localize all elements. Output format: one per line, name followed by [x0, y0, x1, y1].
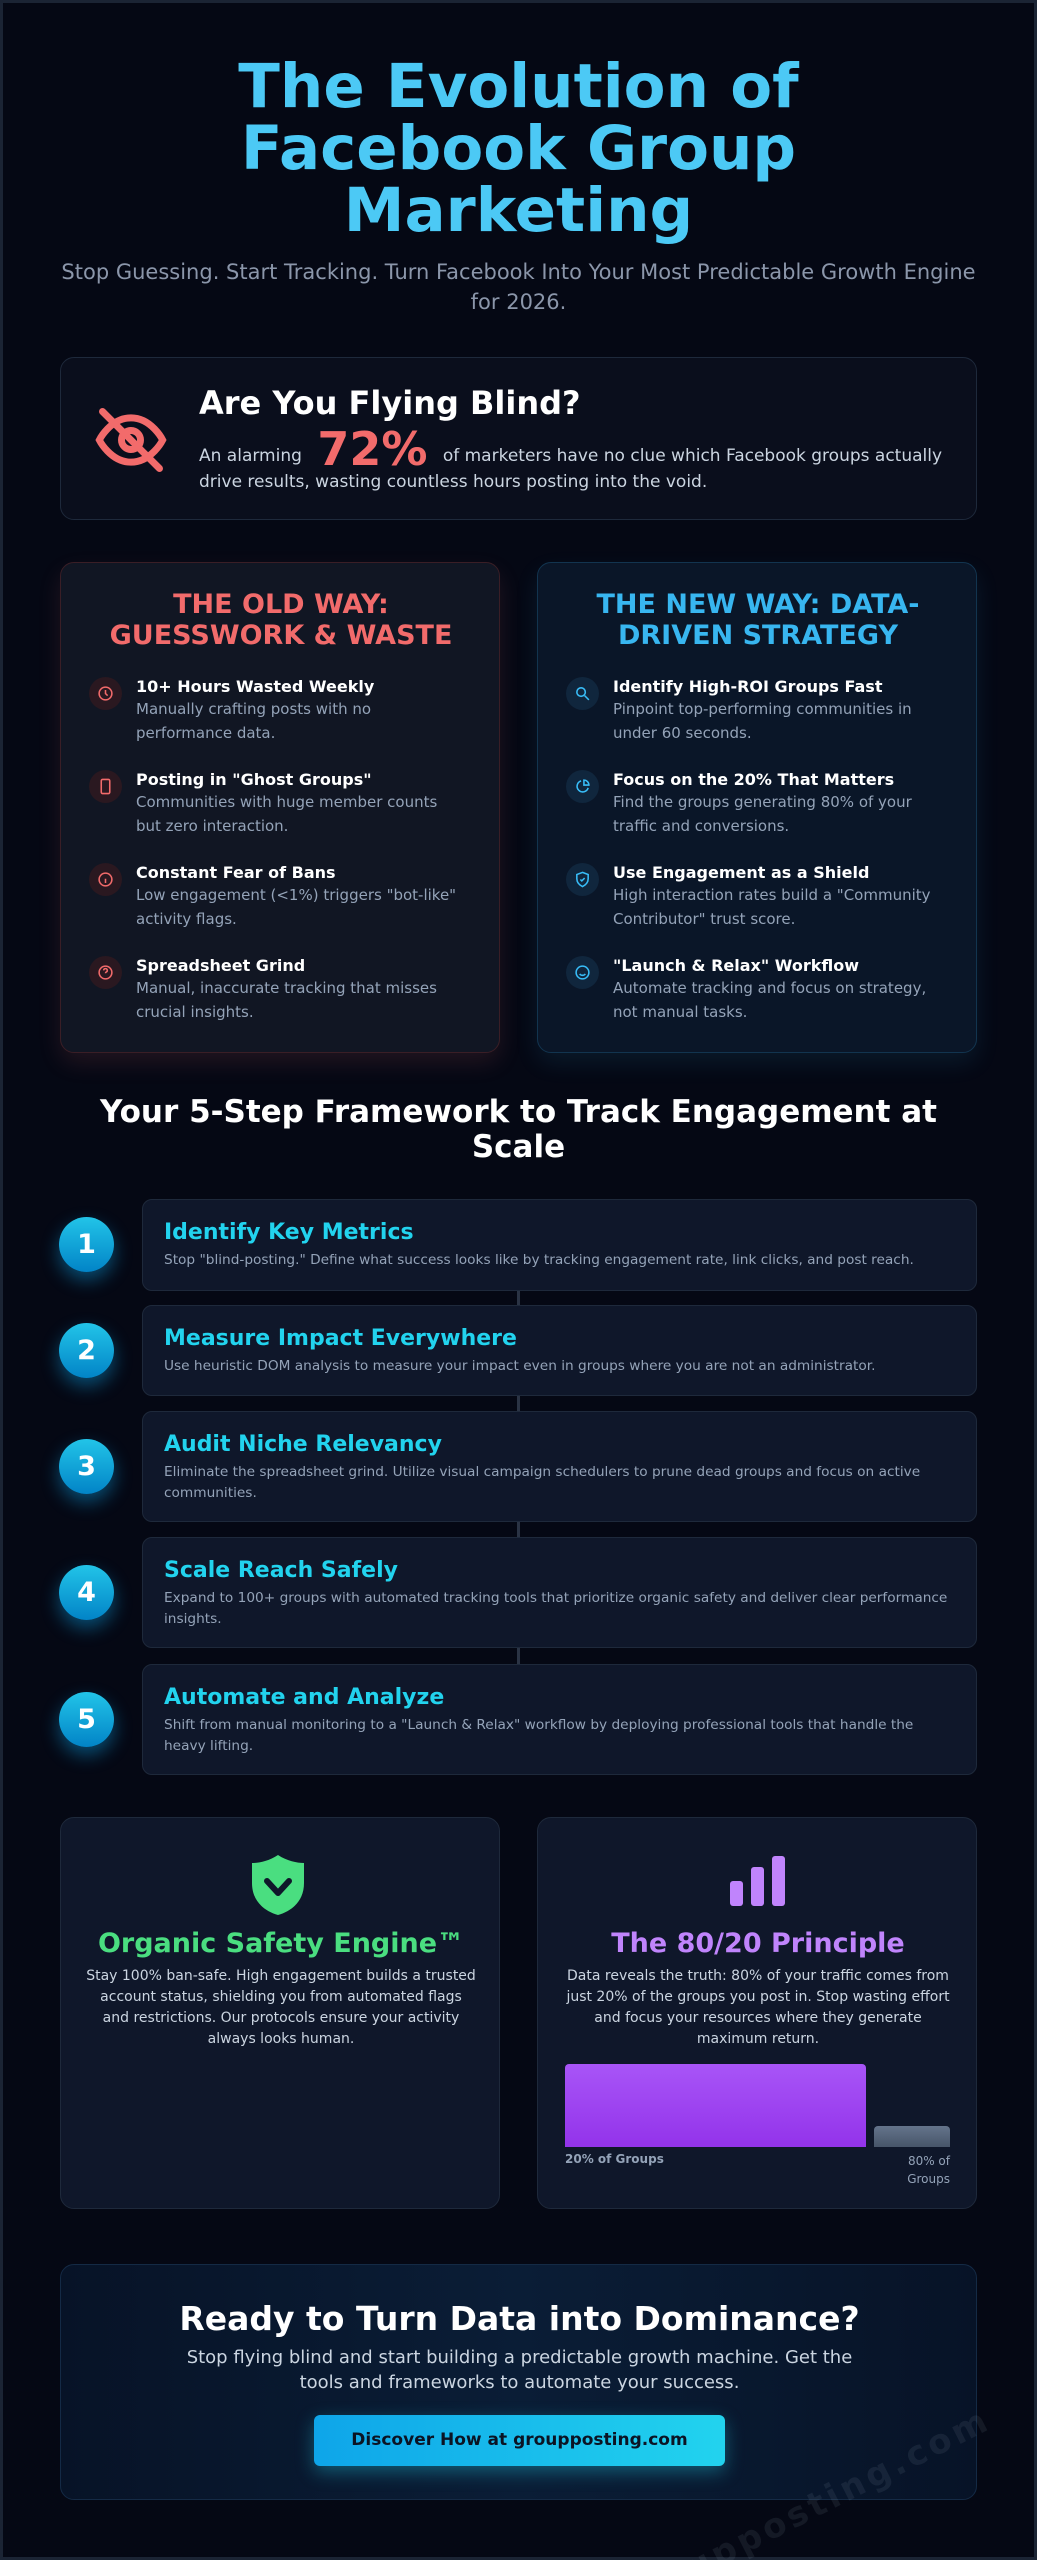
title: The 80/20 Principle — [611, 1928, 905, 1959]
item: hours wasted — [89, 677, 374, 742]
step 2: 2 — [77, 1335, 96, 1366]
heading — [110, 589, 452, 651]
text: Data reveals the truth: 80% of your traffic comes from just 20% of the groups you post in. Stop wasting effort and focus your resources where they generate maximum return. — [566, 1968, 950, 2047]
panel: new way: Automate tracking and focus on strategy, not manual tasks. — [613, 979, 926, 1021]
item: 20% — [566, 770, 912, 835]
step 5: Shift from manual monitoring to a "Launch & Relax" workflow by deploying professional tools that handle the heavy lifting. — [164, 1717, 913, 1754]
button: Discover How at groupposting.com — [351, 2430, 688, 2450]
panel: new way: Use Engagement as a Shield — [613, 863, 869, 882]
panel: old way: Manual, inaccurate tracking that misses crucial insights. — [136, 979, 437, 1021]
title: Marketing — [344, 175, 693, 246]
step 1 — [48, 1199, 977, 1291]
step 5: 5 — [77, 1704, 96, 1735]
panel: CTA — [60, 2264, 977, 2500]
panel: old way: Communities with huge member counts but zero interaction. — [136, 793, 437, 835]
step 1: 1 — [77, 1229, 96, 1260]
heading: THE OLD WAY: — [173, 589, 389, 620]
item: spreadsheet grind — [89, 956, 437, 1021]
panel: old way: Constant Fear of Bans — [136, 863, 336, 882]
text: Stop flying blind and start building a predictable growth machine. Get the tools and frameworks to automate your success. — [187, 2347, 852, 2393]
step 4: Expand to 100+ groups with automated tracking tools that prioritize organic safety and deliver clear performance insights. — [164, 1590, 947, 1627]
panel: old way: Manually crafting posts with no performance data. — [136, 700, 371, 742]
icon: shield — [252, 1855, 304, 1915]
panel: new way: Identify High-ROI Groups Fast — [613, 677, 882, 696]
step 4: 4 — [77, 1577, 96, 1608]
step 2 — [48, 1305, 977, 1396]
stat text: An alarming 72% of marketers have no clue which Facebook groups actually drive results, wasting countless hours posting into the void. — [199, 422, 942, 492]
subtitle: Stop Guessing. Start Tracking. Turn Facebook Into Your Most Predictable Growth Engine for 2026. — [61, 260, 976, 314]
heading: Ready to Turn Data into Dominance? — [179, 2299, 860, 2338]
item: launch relax — [566, 956, 926, 1021]
step 4 — [48, 1537, 977, 1648]
title: Facebook Group — [241, 113, 796, 184]
connector line — [517, 1290, 520, 1670]
heading: DRIVEN STRATEGY — [618, 620, 898, 651]
text: Stay 100% ban-safe. High engagement builds a trusted account status, shielding you from automated flags and restrictions. Our protocols ensure your activity always looks human. — [86, 1968, 476, 2047]
bar chart: 20% of Groups — [565, 2152, 664, 2166]
heading — [596, 589, 920, 651]
panel: new way: Focus on the 20% That Matters — [613, 770, 894, 789]
panel: new way: High interaction rates build a "Community Contributor" trust score. — [613, 886, 931, 928]
panel: new way: Pinpoint top-performing communities in under 60 seconds. — [613, 700, 912, 742]
heading: GUESSWORK & WASTE — [110, 620, 452, 651]
step 3: Eliminate the spreadsheet grind. Utilize visual campaign schedulers to prune dead groups and focus on active communities. — [164, 1464, 920, 1501]
step 1: Identify Key Metrics — [164, 1220, 414, 1245]
title — [238, 51, 800, 246]
heading: Are You Flying Blind? — [199, 384, 581, 422]
step 5 — [48, 1664, 977, 1775]
panel: organic safety — [60, 1817, 500, 2209]
item: high roi — [566, 677, 912, 742]
bar chart: 80% of — [908, 2154, 950, 2168]
step 5: Automate and Analyze — [164, 1685, 444, 1710]
panel: old way: Low engagement (<1%) triggers "bot-like" activity flags. — [136, 886, 456, 928]
panel: old way: 10+ Hours Wasted Weekly — [136, 677, 374, 696]
panel: new way — [537, 562, 977, 1053]
bar chart — [565, 2064, 950, 2186]
icon: eye off — [96, 408, 166, 472]
panel: old way: Posting in "Ghost Groups" — [136, 770, 372, 789]
step 3: Audit Niche Relevancy — [164, 1432, 442, 1457]
title: The Evolution of — [238, 51, 799, 122]
panel: new way: "Launch & Relax" Workflow — [613, 956, 859, 975]
panel: flying blind — [60, 357, 977, 520]
heading: THE NEW WAY: DATA- — [596, 589, 920, 620]
icon: bars — [730, 1856, 785, 1906]
step 2: Measure Impact Everywhere — [164, 1326, 517, 1351]
panel: old way: Spreadsheet Grind — [136, 956, 305, 975]
step 3: 3 — [77, 1451, 96, 1482]
step 4: Scale Reach Safely — [164, 1558, 398, 1583]
item: ghost groups — [89, 770, 437, 835]
step 2: Use heuristic DOM analysis to measure your impact even in groups where you are not an administrator. — [164, 1358, 876, 1374]
bar chart: Groups — [907, 2172, 950, 2186]
panel: 80/20 — [537, 1817, 977, 2209]
title: Organic Safety Engine™ — [98, 1928, 464, 1959]
panel: new way: Find the groups generating 80% of your traffic and conversions. — [613, 793, 912, 835]
item: fear of bans — [89, 863, 456, 928]
step 3 — [48, 1411, 977, 1522]
panel: old way — [60, 562, 500, 1053]
item: shield — [566, 863, 931, 928]
heading: framework: Your 5-Step Framework to Track Engagement at Scale — [100, 1094, 937, 1165]
button — [314, 2415, 725, 2466]
step 1: Stop "blind-posting." Define what success looks like by tracking engagement rate, link clicks, and post reach. — [164, 1252, 914, 1268]
